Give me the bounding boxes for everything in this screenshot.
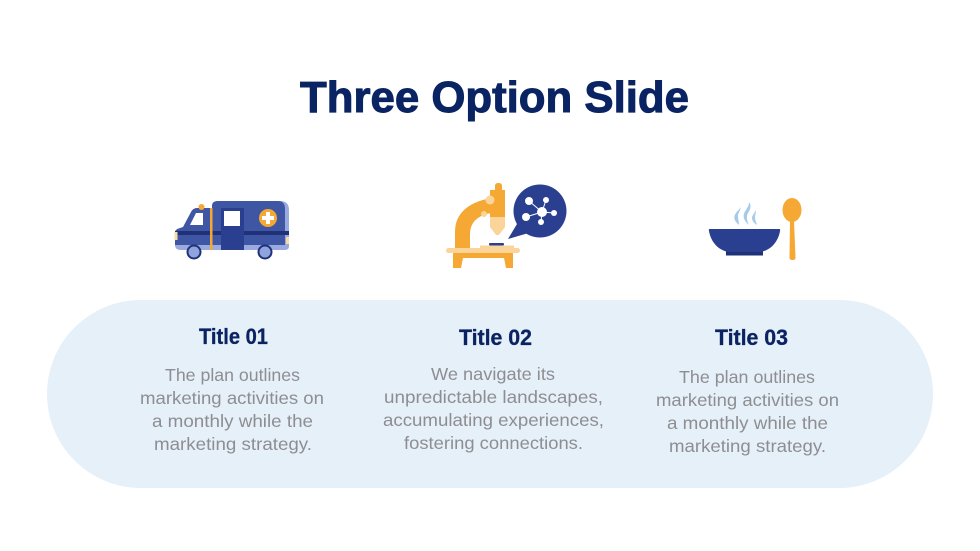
text block: description 03: a monthly while the <box>667 413 828 433</box>
column: title 01 <box>140 324 324 454</box>
text block: description 01: marketing activities on <box>140 388 324 408</box>
text block: description 03: marketing activities on <box>656 390 839 410</box>
column: title 02 <box>383 325 604 453</box>
icon: ambulance <box>174 201 289 258</box>
text block: description 02: accumulating experiences, <box>383 410 604 430</box>
text block: description 01: The plan outlines <box>165 365 300 385</box>
text block: description 01 <box>140 365 324 454</box>
text block: description 03 <box>656 367 839 456</box>
icon: soup bowl and spoon <box>709 198 802 260</box>
text block: description 02: unpredictable landscapes, <box>384 387 603 407</box>
heading: title 02: Title 02 <box>459 325 532 350</box>
text block: description 01: a monthly while the <box>152 411 313 431</box>
panel: rounded background <box>47 300 933 488</box>
heading: title 03: Title 03 <box>715 325 788 350</box>
column: title 03 <box>656 325 839 456</box>
text block: description 02 <box>383 364 604 453</box>
text block: description 03: The plan outlines <box>679 367 815 387</box>
title: Three Option Slide <box>300 73 689 122</box>
text block: description 01: marketing strategy. <box>154 434 312 454</box>
icon: microscope with speech bubble <box>446 183 566 268</box>
text block: description 02: We navigate its <box>431 364 555 384</box>
heading: title 01: Title 01 <box>199 324 268 349</box>
text block: description 02: fostering connections. <box>404 433 583 453</box>
text block: description 03: marketing strategy. <box>669 436 826 456</box>
